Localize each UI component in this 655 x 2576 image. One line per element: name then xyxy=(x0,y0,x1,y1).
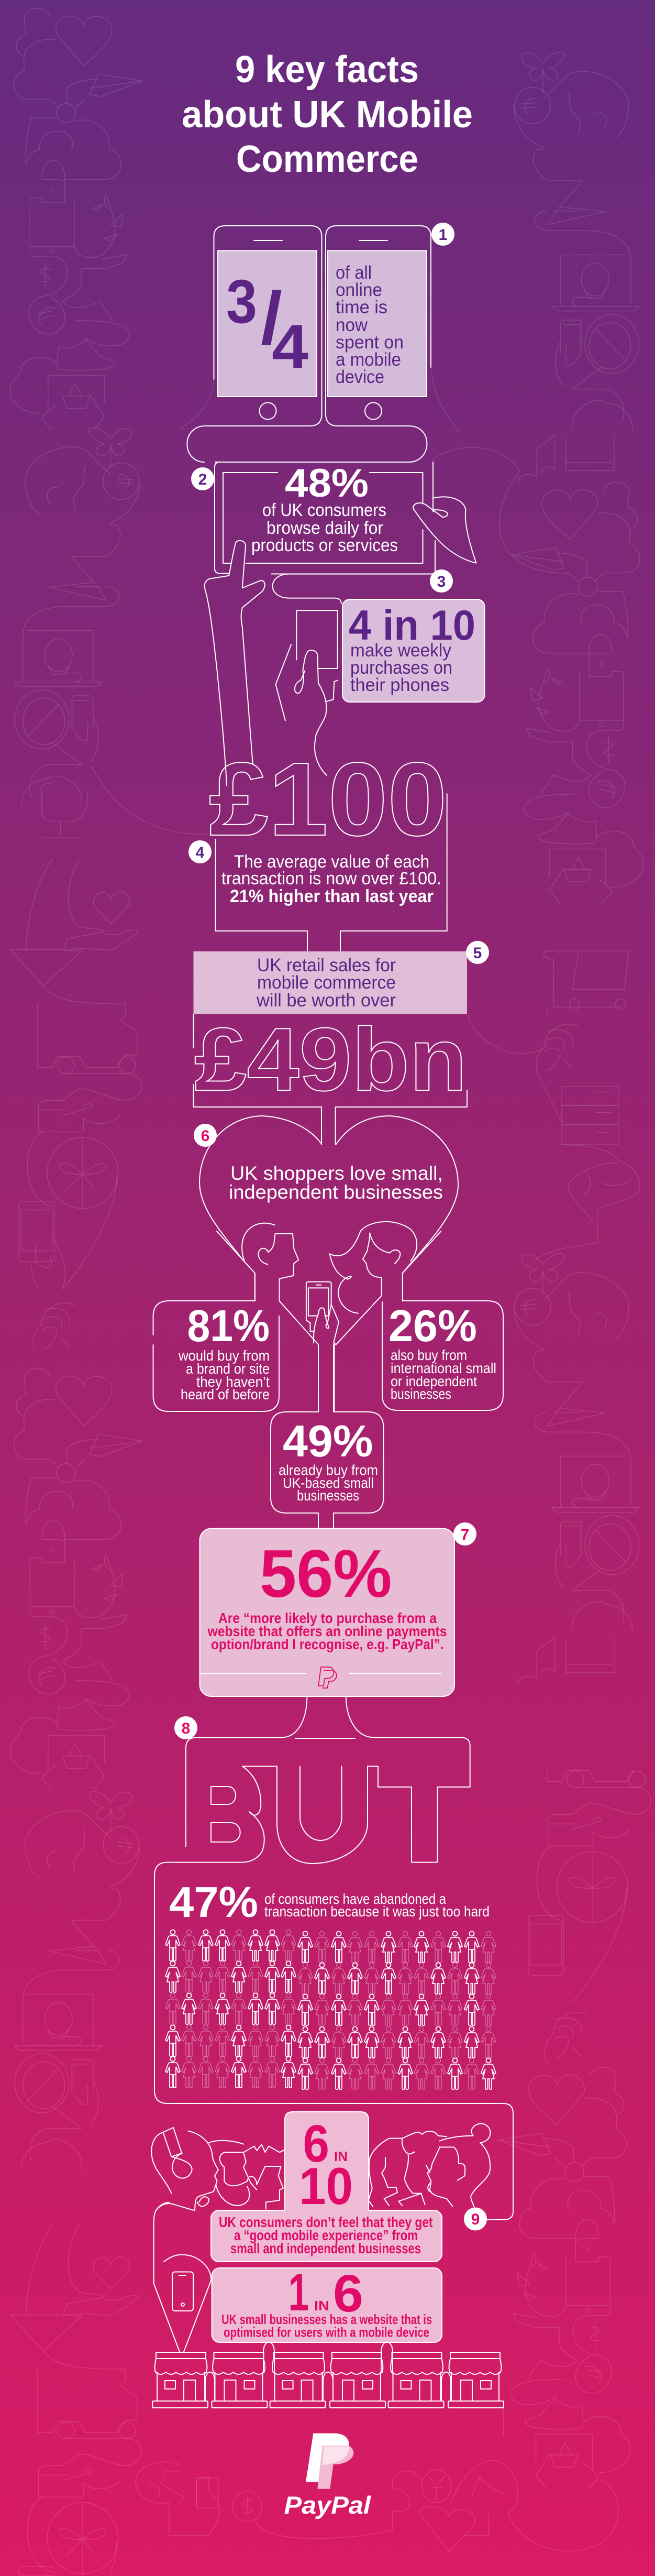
phone icon xyxy=(172,2272,193,2311)
fact 2 text: products or services xyxy=(251,535,398,555)
title: Commerce xyxy=(236,138,418,180)
fact 1 text: a mobile xyxy=(336,349,401,370)
fact 2: tablet xyxy=(191,461,476,786)
crowd of heads line art xyxy=(151,2123,491,2211)
1 in 6 panel xyxy=(212,2263,442,2342)
£100 outlined figure: £100 xyxy=(209,741,447,858)
connector from crowd to badge 9 and pin xyxy=(154,2202,169,2283)
PayPal logo xyxy=(284,2434,371,2519)
three quarters figure: / xyxy=(261,277,282,360)
26% stat: 26% xyxy=(388,1301,477,1351)
6 in 10 figure: 10 xyxy=(299,2157,353,2215)
81% stat: a brand or site xyxy=(186,1361,270,1377)
26% stat: businesses xyxy=(391,1386,451,1402)
wordmark: PayPal xyxy=(284,2491,371,2519)
81% stat: heard of before xyxy=(181,1386,270,1402)
fact 9 text: small and independent businesses xyxy=(230,2240,421,2256)
fact 6 heading: independent businesses xyxy=(229,1181,443,1203)
48% figure: 48% xyxy=(285,461,369,506)
fact 6 heading: UK shoppers love small, xyxy=(230,1163,443,1184)
49% stat: UK-based small xyxy=(283,1475,374,1491)
1 in 6 figure: 1 xyxy=(288,2263,309,2322)
fact 4 frame xyxy=(216,794,447,951)
heart outline xyxy=(153,1116,321,1411)
fact 8: BUT xyxy=(154,1696,513,2220)
badge 8: 8 xyxy=(182,1720,190,1737)
26% stat: also buy from xyxy=(391,1347,467,1363)
pin outline xyxy=(154,2255,211,2352)
badge 3: 3 xyxy=(437,573,446,590)
fact 5: retail sales xyxy=(194,941,489,1144)
fact 7 text: option/brand I recognise, e.g. PayPal”. xyxy=(211,1636,444,1652)
BUT outlined lettering and frame xyxy=(154,1696,513,2220)
fact 1 text: online xyxy=(336,280,382,300)
badge 5 xyxy=(466,941,489,964)
badge 8 xyxy=(174,1716,197,1739)
6 in 10 figure xyxy=(299,2114,353,2215)
badge 9 xyxy=(464,2208,487,2231)
81% stat: they haven’t xyxy=(196,1374,270,1390)
panel text xyxy=(221,2311,432,2340)
badge 4: 4 xyxy=(196,844,205,861)
49% stat: businesses xyxy=(297,1487,359,1504)
47% figure: 47% xyxy=(169,1878,258,1926)
fact 4 text: The average value of each xyxy=(234,852,429,872)
fact 8 text xyxy=(264,1891,490,1920)
panel text: optimised for users with a mobile device xyxy=(224,2324,429,2340)
fact 4 text: transaction is now over £100. xyxy=(221,869,441,889)
title: 9 key facts xyxy=(235,49,419,91)
fact 1 text: spent on xyxy=(336,332,404,353)
fact 5 frame xyxy=(194,1014,467,1144)
26% stat: or independent xyxy=(391,1373,477,1389)
left phone screen xyxy=(218,250,317,397)
fact 2 text xyxy=(251,500,398,555)
three quarters figure xyxy=(226,267,308,381)
fact 1 text: device xyxy=(336,367,384,387)
icon: PayPal double P xyxy=(306,2434,353,2489)
row of shops xyxy=(152,2342,504,2408)
4 in 10 figure: 4 in 10 xyxy=(349,602,475,649)
fact 5 text: UK retail sales for xyxy=(257,955,396,975)
badge 7: 7 xyxy=(461,1526,469,1543)
49% stat xyxy=(279,1417,378,1504)
fact 3 text: purchases on xyxy=(350,657,452,678)
title xyxy=(182,49,473,180)
81% stat: 81% xyxy=(187,1301,270,1351)
fact 1: two phones xyxy=(187,223,454,462)
81% stat: would buy from xyxy=(178,1347,270,1364)
fact 4 text xyxy=(221,852,441,906)
4 in 10 panel xyxy=(342,599,485,702)
badge 7 xyxy=(453,1522,476,1545)
three quarters figure: 4 xyxy=(272,312,308,381)
fact 5 text: will be worth over xyxy=(256,990,396,1011)
fact 7 text: website that offers an online payments xyxy=(207,1623,447,1639)
map pin with phone xyxy=(154,2255,211,2352)
badge 2 xyxy=(191,467,214,490)
badge 6: 6 xyxy=(201,1127,209,1145)
pictogram grid: 47 of 100 people xyxy=(165,1930,496,2089)
fact 5 text xyxy=(256,955,396,1011)
6 in 10 panel xyxy=(285,2112,369,2216)
6 in 10 figure: IN xyxy=(334,2149,348,2164)
phone outlines and pill xyxy=(187,226,431,462)
badge 4 xyxy=(188,840,212,863)
heart outline right xyxy=(336,1116,503,1410)
fact 5 panel xyxy=(194,951,467,1014)
49% stat: 49% xyxy=(283,1417,373,1466)
badge 5: 5 xyxy=(473,945,482,962)
fact 1 text: now xyxy=(336,315,368,335)
1 in 6 figure xyxy=(288,2263,363,2323)
tablet outline and hands xyxy=(205,462,476,786)
fact 1 text xyxy=(336,262,404,387)
fact 7 panel xyxy=(200,1529,454,1696)
fact 2 text: browse daily for xyxy=(267,518,383,538)
panel background xyxy=(212,2268,442,2342)
fact 6 heading xyxy=(229,1163,443,1203)
56% figure: 56% xyxy=(260,1536,392,1612)
fact 4 text: 21% higher than last year xyxy=(230,886,434,906)
49% stat: already buy from xyxy=(279,1462,378,1478)
81% stat xyxy=(178,1301,270,1402)
fact 3 text: their phones xyxy=(350,675,449,695)
fact 7: PayPal panel xyxy=(200,1522,476,1696)
fact 1 text: of all xyxy=(336,262,372,283)
fact 9: 6 in 10 xyxy=(151,2112,491,2283)
fact 3 text xyxy=(350,640,452,695)
fact 9 text: UK consumers don’t feel that they get xyxy=(219,2214,432,2230)
badge 1 xyxy=(431,223,454,246)
three quarters figure: 3 xyxy=(226,267,257,336)
hand and phone line art xyxy=(273,574,435,775)
fact 9 lower panel xyxy=(211,2210,442,2262)
fact 1 text: time is xyxy=(336,297,387,317)
fact 6: heart and couple xyxy=(153,1116,503,1529)
1 in 6 figure: IN xyxy=(314,2298,329,2314)
fact 5 text: mobile commerce xyxy=(257,972,396,993)
divider and PayPal mark xyxy=(200,1667,442,1688)
panel text: UK small businesses has a website that is xyxy=(221,2311,432,2327)
badge 3 xyxy=(430,569,453,593)
couple line art xyxy=(217,1222,441,1411)
title: about UK Mobile xyxy=(182,94,473,136)
badge 6 xyxy=(194,1124,217,1147)
right phone screen xyxy=(328,250,427,397)
badge 9: 9 xyxy=(471,2211,480,2228)
fact 9 text xyxy=(219,2214,432,2256)
fact 9 text: a “good mobile experience” from xyxy=(234,2227,418,2243)
1 in 6 figure: 6 xyxy=(333,2264,363,2323)
49% stat frame xyxy=(271,1345,383,1529)
badge 2: 2 xyxy=(198,471,207,488)
6 in 10 figure: 6 xyxy=(303,2114,329,2173)
fact 2 text: of UK consumers xyxy=(262,500,386,520)
fact 8 text: transaction because it was just too hard xyxy=(264,1903,490,1920)
fact 3: hand holding phone xyxy=(273,569,485,775)
£49 bn outlined figure: £49bn xyxy=(194,1010,467,1110)
fact 4: £100 xyxy=(188,741,447,951)
fact 7 text xyxy=(207,1610,447,1652)
badge 1: 1 xyxy=(439,226,447,244)
26% stat: international small xyxy=(391,1360,496,1376)
fact 3 text: make weekly xyxy=(350,640,451,661)
26% stat xyxy=(388,1301,496,1402)
fact 7 text: Are “more likely to purchase from a xyxy=(218,1610,437,1626)
fact 8 text: of consumers have abandoned a xyxy=(264,1891,446,1907)
